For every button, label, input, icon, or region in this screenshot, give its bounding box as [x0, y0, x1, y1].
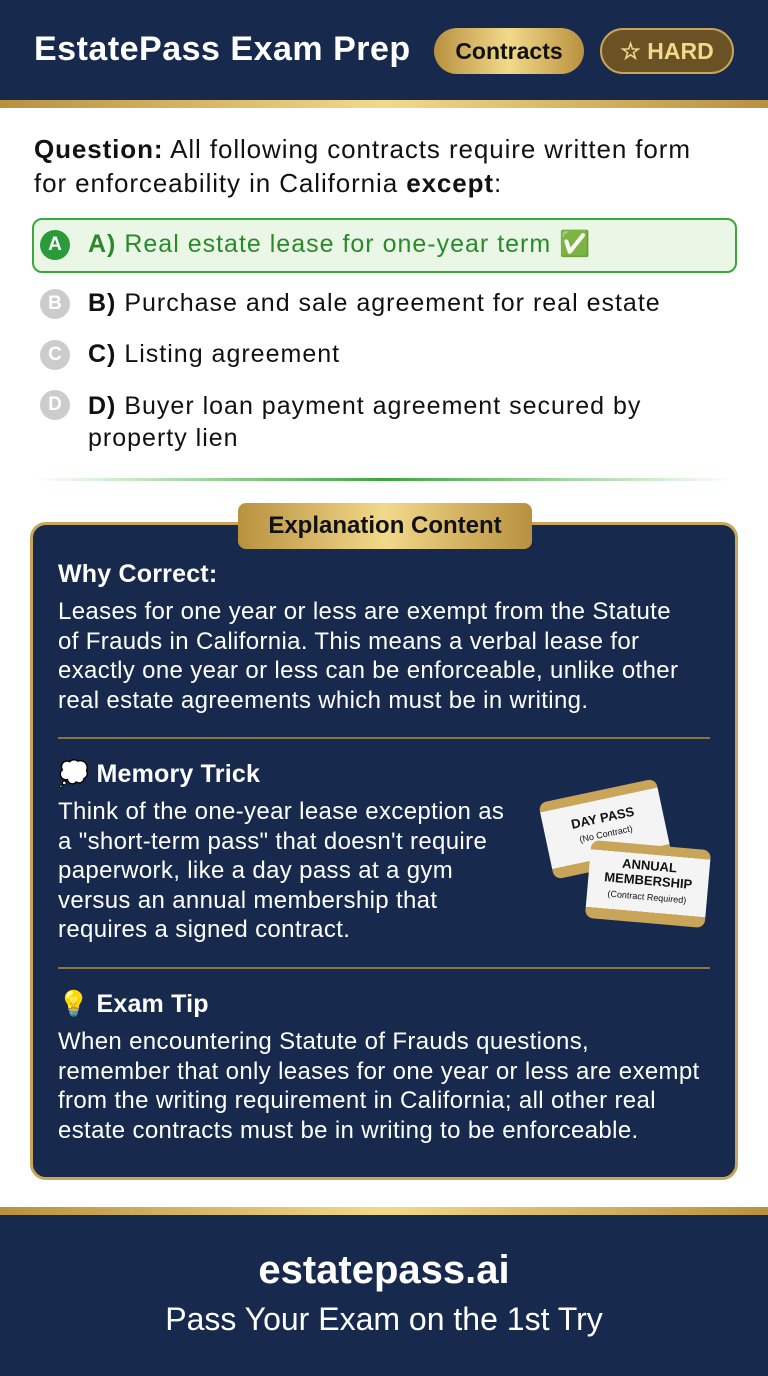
why correct [58, 560, 678, 714]
exam tip: estate contracts must be in writing to be enforceable. [58, 1116, 639, 1144]
heading: explanation content: Explanation Content [268, 512, 502, 539]
option D: D [48, 394, 62, 415]
exam tip: from the writing requirement in California; all other real [58, 1087, 656, 1114]
why correct: Why Correct: [58, 560, 217, 588]
memory trick [58, 759, 504, 943]
illustration: passes: (Contract Required) [607, 889, 687, 905]
footer [0, 1215, 768, 1376]
illustration: passes: DAY PASS [570, 804, 635, 832]
memory trick: Think of the one-year lease exception as [58, 798, 504, 825]
heading: explanation content [238, 503, 532, 549]
question: Question: All following contracts require written form [34, 134, 691, 164]
title: EstatePass Exam Prep [34, 30, 411, 68]
option C: C) Listing agreement [88, 340, 340, 368]
why correct: of Frauds in California. This means a verbal lease for [58, 628, 639, 654]
badge: hard [600, 28, 734, 74]
option D [40, 390, 641, 452]
why correct: real estate agreements which must be in writing. [58, 686, 588, 714]
illustration: passes: MEMBERSHIP [604, 869, 693, 892]
illustration: passes: (No Contract) [579, 823, 633, 844]
panel: explanation [30, 522, 738, 1180]
memory trick: 💭 Memory Trick [58, 760, 260, 788]
exam tip: 💡 Exam Tip [58, 990, 209, 1018]
exam tip: When encountering Statute of Frauds questions, [58, 1028, 589, 1055]
memory trick: a "short-term pass" that doesn't require [58, 828, 487, 854]
option D: property lien [88, 424, 239, 452]
badge: hard: ☆ HARD [620, 38, 714, 64]
badge: contracts [434, 28, 584, 74]
header [0, 0, 768, 100]
memory trick: requires a signed contract. [58, 916, 350, 943]
exam tip: remember that only leases for one year or less are exempt [58, 1058, 700, 1084]
exam tip [58, 990, 700, 1144]
memory trick: paperwork, like a day pass at a gym [58, 857, 453, 884]
option C: C [48, 344, 62, 365]
footer: estatepass.ai [258, 1248, 510, 1292]
illustration: passes [540, 780, 710, 928]
why correct: Leases for one year or less are exempt from the Statute [58, 598, 671, 625]
text: A [48, 234, 62, 255]
question [34, 134, 691, 198]
option B: B [48, 293, 62, 314]
option D: D) Buyer loan payment agreement secured by [88, 392, 641, 420]
footer: Pass Your Exam on the 1st Try [165, 1301, 603, 1337]
question: for enforceability in California except: [34, 168, 502, 198]
option A correct [32, 218, 737, 273]
badge: contracts: Contracts [455, 38, 563, 64]
memory trick: versus an annual membership that [58, 886, 437, 914]
why correct: exactly one year or less can be enforceable, unlike other [58, 657, 678, 684]
illustration: passes: ANNUAL [622, 856, 678, 875]
option B: B) Purchase and sale agreement for real estate [88, 289, 661, 317]
text: A) Real estate lease for one-year term ✅ [88, 230, 591, 258]
